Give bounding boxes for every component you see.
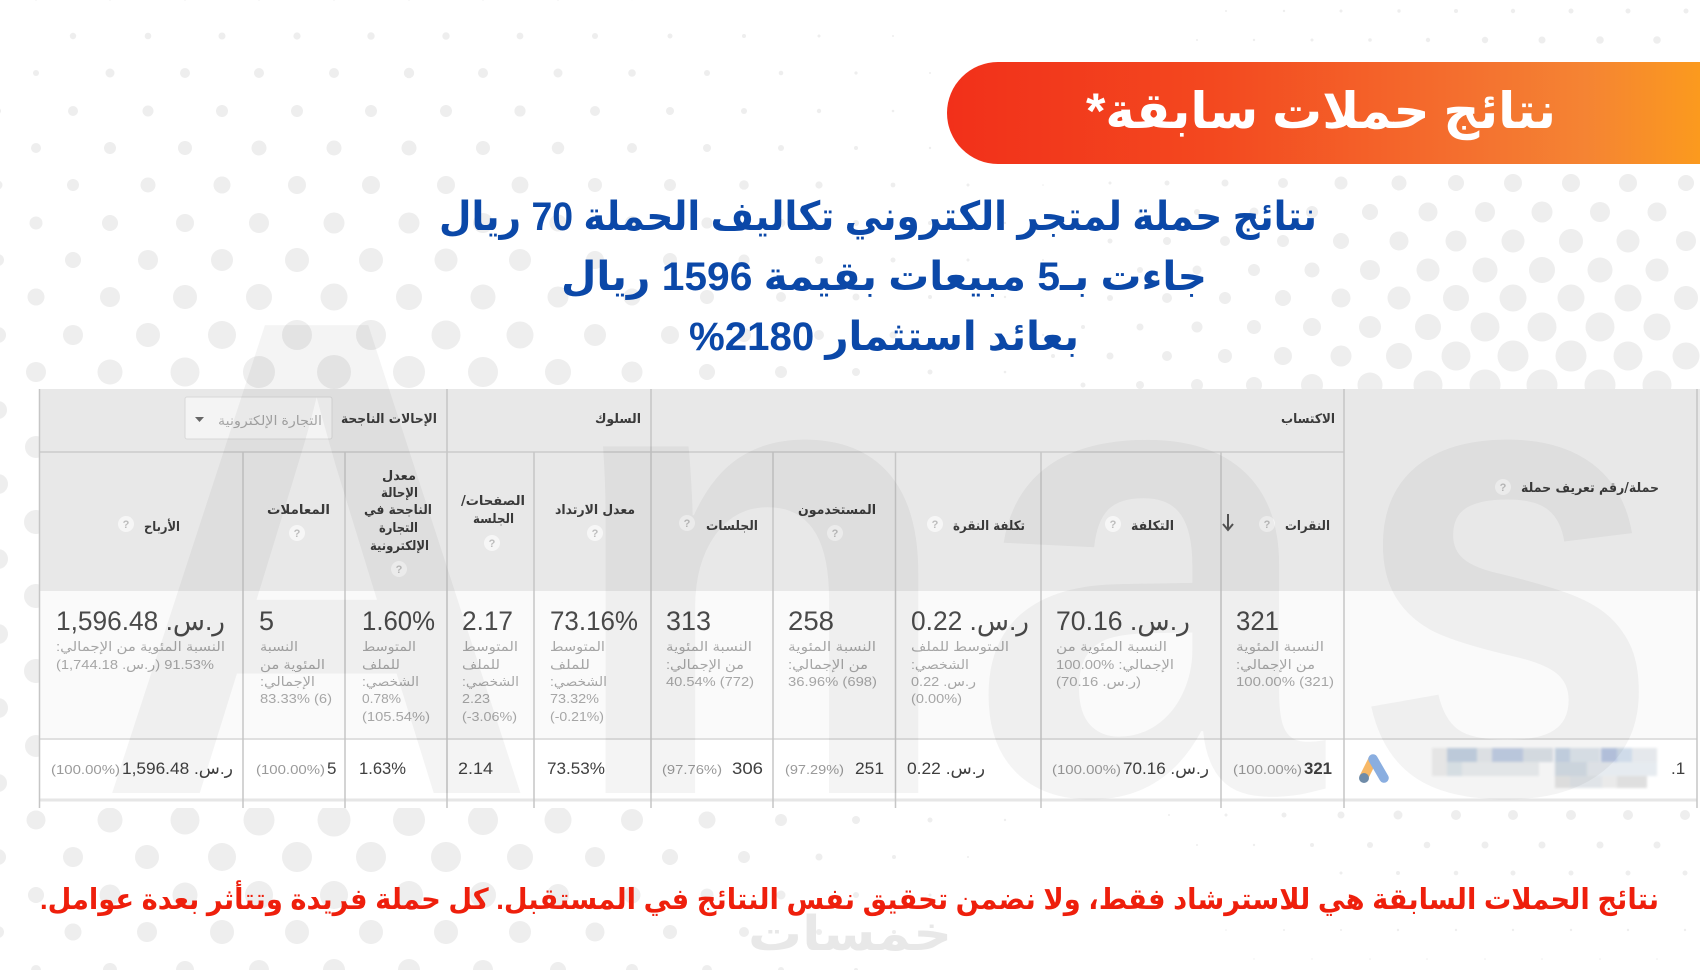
column: sessions: ? xyxy=(684,518,691,530)
column: cost per click: المتوسط للملف xyxy=(911,639,1009,655)
column: pages per session: الشخصي: xyxy=(462,674,519,689)
column: revenue: ر.س. 1,596.48 xyxy=(122,759,233,778)
column: sessions: الجلسات xyxy=(706,519,758,534)
column: bounce rate xyxy=(547,503,638,778)
column: users: 251 xyxy=(855,759,884,778)
column: bounce rate: ? xyxy=(592,528,599,540)
column: ecommerce conversion rate: الإلكترونية xyxy=(370,539,429,554)
column: users xyxy=(785,503,884,778)
title banner xyxy=(947,62,1700,164)
watermark: Anas: a xyxy=(970,199,1326,933)
column: cost per click: الشخصي: xyxy=(911,657,969,672)
column: transactions: 5 xyxy=(259,606,274,636)
column: revenue: الأرباح xyxy=(144,518,180,535)
blurred campaign name xyxy=(1432,748,1657,788)
watermark: Anas: A xyxy=(97,178,537,937)
column: ecommerce conversion rate: للملف xyxy=(362,657,400,672)
column: revenue: 91.53% (ر.س. 1,744.18) xyxy=(56,657,214,673)
column: pages per session: المتوسط xyxy=(462,639,518,655)
watermark: Anas: n xyxy=(560,198,959,932)
group heading: behaviour: السلوك xyxy=(595,412,641,427)
column: cost per click xyxy=(907,516,1029,778)
column: sessions: 40.54% (772) xyxy=(666,674,754,689)
column: revenue: ر.س. 1,596.48 xyxy=(56,606,225,637)
column: transactions: المئوية من xyxy=(260,657,325,673)
column: pages per session: الصفحات/ xyxy=(461,494,525,509)
column: sessions: 313 xyxy=(666,606,711,636)
column: cost: ? xyxy=(1110,519,1117,531)
column: revenue: النسبة المئوية من الإجمالي: xyxy=(56,639,225,655)
column: cost per click: ر.س. 0.22 xyxy=(911,606,1029,637)
column: bounce rate: 73.53% xyxy=(547,759,605,778)
column: clicks xyxy=(1223,514,1334,778)
analytics table panel xyxy=(39,389,1700,808)
column: ecommerce conversion rate: ? xyxy=(396,564,403,576)
campaign results headline: نتائج حملة لمتجر الكتروني تكاليف الحملة 70 ريال xyxy=(439,195,1317,240)
column: bounce rate: 73.16% xyxy=(550,606,638,636)
column: ecommerce conversion rate: 1.60% xyxy=(362,606,435,636)
column: transactions: 83.33% (6) xyxy=(260,691,332,706)
column: clicks: 321 xyxy=(1236,606,1279,636)
group heading: conversions: الإحالات الناجحة xyxy=(341,412,437,427)
campaign results headline: بعائد استثمار 2180% xyxy=(689,315,1079,360)
column: cost per click: تكلفة النقرة xyxy=(953,519,1025,534)
column: ecommerce conversion rate: المتوسط xyxy=(362,639,416,655)
column: revenue: ? xyxy=(123,519,130,531)
column: pages per session: الجلسة xyxy=(473,512,514,527)
column: campaign xyxy=(1359,479,1685,788)
column: pages per session: 2.14 xyxy=(458,759,493,778)
column: pages per session: (-3.06%) xyxy=(462,709,517,724)
column: ecommerce conversion rate: الإحالة xyxy=(381,486,418,501)
column: cost per click: ر.س. 0.22 xyxy=(911,674,976,690)
column: ecommerce conversion rate: الناجحة في xyxy=(364,503,432,518)
column: transactions: ? xyxy=(294,528,301,540)
column: ecommerce conversion rate: التجارة xyxy=(379,521,418,536)
column: sessions xyxy=(662,515,763,778)
column: users: ? xyxy=(832,528,839,540)
column: cost: ر.س. 70.16 xyxy=(1123,759,1209,778)
title text: نتائج حملات سابقة* xyxy=(1086,83,1556,141)
column: clicks: 321 xyxy=(1304,759,1332,778)
ecommerce dropdown: التجارة الإلكترونية xyxy=(218,413,322,429)
icon: Google Ads logo xyxy=(1359,759,1384,783)
column: revenue xyxy=(51,516,233,778)
column: users: من الإجمالي: xyxy=(788,657,868,673)
column: ecommerce conversion rate: الشخصي: xyxy=(362,674,419,689)
column: sessions: النسبة المئوية xyxy=(666,639,752,655)
column: pages per session: للملف xyxy=(462,657,500,672)
watermark: Anas xyxy=(97,178,1662,937)
khamsat logo watermark: خمسات xyxy=(748,908,952,961)
column: ecommerce conversion rate: 1.63% xyxy=(359,759,406,778)
column: transactions: المعاملات xyxy=(267,503,330,518)
column: cost: (ر.س. 70.16) xyxy=(1056,674,1141,690)
column: sessions: (97.76%) xyxy=(662,762,722,777)
column: cost per click: ? xyxy=(932,519,939,531)
column: bounce rate: للملف xyxy=(550,657,590,672)
column: pages per session: 2.17 xyxy=(462,606,513,636)
column: ecommerce conversion rate xyxy=(359,469,435,778)
column: clicks: (100.00%) xyxy=(1233,762,1302,777)
column: cost: ر.س. 70.16 xyxy=(1056,606,1190,637)
column: transactions: الإجمالي: xyxy=(260,674,315,689)
column: transactions xyxy=(256,503,336,778)
column: bounce rate: 73.32% xyxy=(550,691,599,706)
sort arrow xyxy=(1223,514,1233,530)
column: cost xyxy=(1052,516,1209,778)
column: cost: (100.00%) xyxy=(1052,762,1121,777)
column: clicks: 100.00% (321) xyxy=(1236,674,1334,689)
column: ecommerce conversion rate: 0.78% xyxy=(362,691,401,706)
column: clicks: النقرات xyxy=(1285,519,1330,534)
column: sessions: 306 xyxy=(732,759,763,778)
column: pages per session: 2.23 xyxy=(462,691,490,706)
column: clicks: من الإجمالي: xyxy=(1236,657,1315,673)
campaign results headline: جاءت بـ5 مبيعات بقيمة 1596 ريال xyxy=(561,255,1207,300)
column: ecommerce conversion rate: (105.54%) xyxy=(362,709,430,724)
column: cost per click: (0.00%) xyxy=(911,691,962,706)
column: bounce rate: (-0.21%) xyxy=(550,709,604,724)
column: clicks: ? xyxy=(1264,519,1271,531)
column: pages per session: ? xyxy=(489,538,496,550)
column: clicks: النسبة المئوية xyxy=(1236,639,1324,655)
column: revenue: (100.00%) xyxy=(51,762,120,777)
column: cost: الإجمالي: ‎100.00% xyxy=(1056,657,1174,672)
column: pages per session xyxy=(458,494,525,778)
column: users: النسبة المئوية xyxy=(788,639,876,655)
column: users: 36.96% (698) xyxy=(788,674,877,689)
column: cost: التكلفة xyxy=(1131,519,1174,534)
column: users: المستخدمون xyxy=(798,503,876,518)
column: campaign: حملة/رقم تعريف حملة xyxy=(1521,481,1659,496)
column: transactions: 5 xyxy=(327,759,336,778)
column: users: 258 xyxy=(788,606,834,636)
ecommerce dropdown xyxy=(185,397,332,439)
column: transactions: (100.00%) xyxy=(256,762,325,777)
watermark: Anas: s xyxy=(1352,200,1662,933)
column: cost per click: ر.س. 0.22 xyxy=(907,759,985,778)
campaign results headline xyxy=(439,195,1317,360)
group heading: acquisition: الاكتساب xyxy=(1281,412,1335,427)
column: bounce rate: الشخصي: xyxy=(550,674,607,689)
column: bounce rate: معدل الارتداد xyxy=(555,503,635,518)
column: campaign: .1 xyxy=(1671,759,1685,778)
column: bounce rate: المتوسط xyxy=(550,639,605,655)
column: cost: النسبة المئوية من xyxy=(1056,639,1167,655)
column: ecommerce conversion rate: معدل xyxy=(382,469,416,484)
column: transactions: النسبة xyxy=(260,639,298,654)
column: sessions: من الإجمالي: xyxy=(666,657,744,673)
column: users: (97.29%) xyxy=(785,762,844,777)
column: campaign: ? xyxy=(1500,482,1507,494)
